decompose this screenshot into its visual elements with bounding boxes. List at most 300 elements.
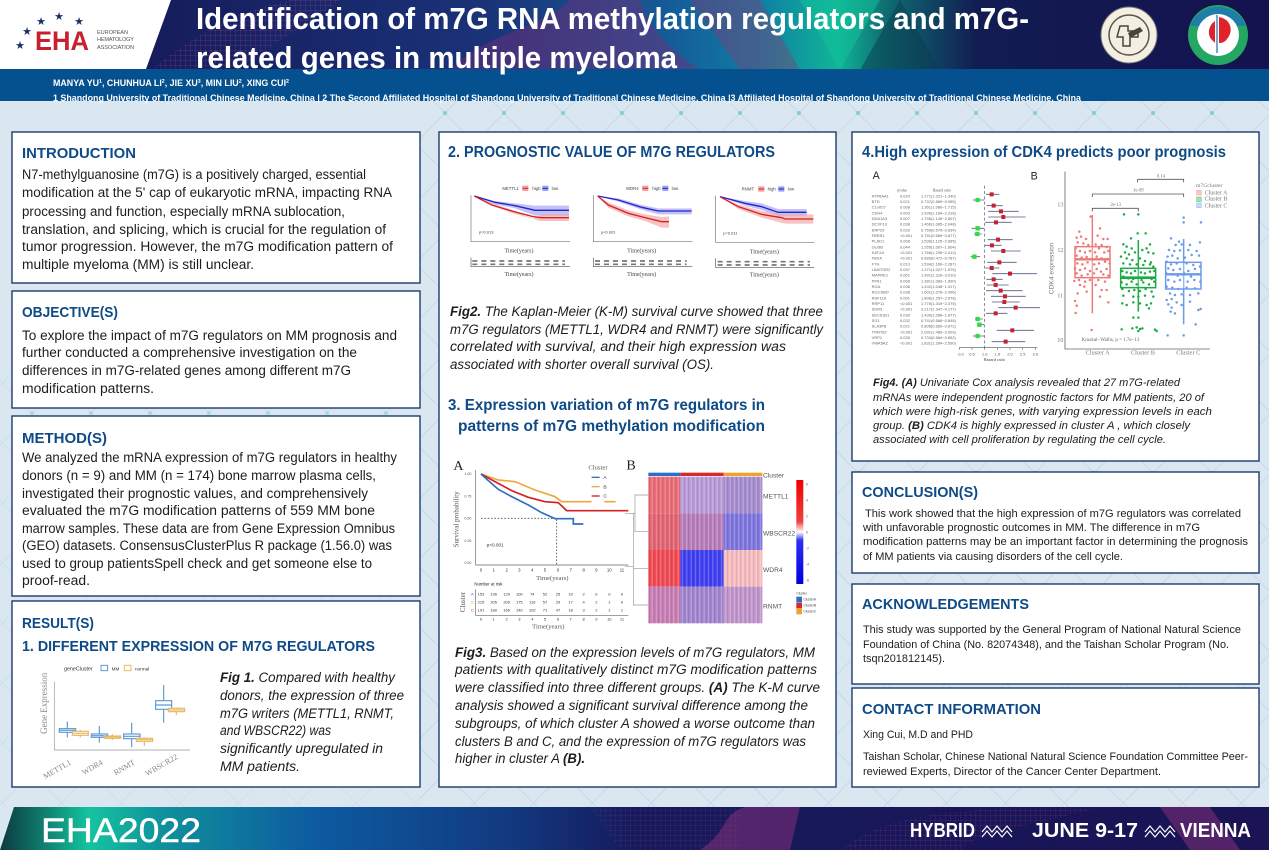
chart: heatmap B [625,458,817,623]
chart: forest plot A: <0.001 [900,256,913,261]
chart: heatmap B: METTL1 [763,494,789,501]
chart: forest plot A: 1.768(1.295−2.412) [921,250,957,255]
chart: forest plot A: 0.008 [900,278,911,283]
chart: CDK4 expression box plot B: Cluster A [1205,190,1228,196]
KM plot: METTL1: low [552,186,559,191]
chart: cluster survival curve A: Survival probability [452,491,460,547]
chart: cluster survival curve A: B [471,599,474,604]
chart: gene expression box plot: RNMT [112,758,137,777]
chart: forest plot A: 0.003 [900,210,911,215]
chart: cluster survival curve A: 6 [557,617,560,622]
KM plot: WDR4: Time(years) [627,271,656,278]
panel: method: evaluated the m7G modification patterns of 559 MM bone [22,503,375,518]
chart: forest plot A: PLAD1 [872,239,885,244]
chart: forest plot A: RGCSBD [872,290,889,295]
fig 2 caption: Fig2. The Kaplan-Meier (K-M) survival curve showed that three [450,304,823,319]
chart: forest plot A: 1.271(1.027−1.575) [921,267,957,272]
chart: forest plot A: 0.5 [969,352,976,357]
panel: method: METHOD(S) [22,430,107,447]
chart: forest plot A: 1.171(1.021−1.340) [921,193,957,198]
chart: forest plot A: 0.008 [900,239,911,244]
panel: acknowledgements: tsqn201812145). [863,653,945,665]
panel: method: We analyzed the mRNA expression of m7G regulators in healthy [22,450,397,465]
chart: cluster survival curve A: 29 [556,599,561,604]
chart: cluster survival curve A: B [603,484,607,490]
panel: acknowledgements: ACKNOWLEDGEMENTS [862,596,1029,613]
chart: forest plot A: 1.991(1.316−3.010) [921,273,957,278]
chart: cluster survival curve A: p<0.001 [487,543,504,548]
chart: heatmap B: WDR4 [763,567,783,574]
chart: forest plot A: 0.038 [900,290,911,295]
chart: gene expression box plot: WDR4 [80,758,104,777]
panel: introduction: N7-methylguanosine (m7G) is a positively charged, essential [22,167,366,182]
chart: cluster survival curve A: Cluster [588,464,608,471]
EHA logo: ★ [22,26,32,38]
chart: cluster survival curve A: 1 [608,599,611,604]
panel: acknowledgements [852,584,1259,684]
KM plot: METTL1: Time(years) [504,248,534,255]
authors and affiliations: 1 Shandong University of Traditional Chinese Medicine, China | 2 The Second Affiliated Hospital of Shandong University of Traditional Chinese Medicine, China |3 Affiliated Hospital of Shandong University of Traditional Chinese Medicine, China [53,92,1082,103]
panel: contact information: Xing Cui, M.D and PHD [863,729,973,741]
footer: event details [910,820,1251,842]
chart: forest plot A: <0.001 [900,301,913,306]
chart: cluster survival curve A: 1 [621,607,624,612]
chart: forest plot A: RGA [872,284,881,289]
KM plot: METTL1: Time(years) [504,271,534,278]
chart: forest plot A: 0.734(0.584−0.852) [921,335,957,340]
fig 2 caption: m7G regulators (METTL1, WDR4 and RNMT) were significantly [450,322,824,337]
fig 4 caption [873,377,1212,446]
heading: expression variation: patterns of m7G methylation modification [458,418,765,435]
fig 3 caption: were classified into three different groups. (A) The K-M curve [455,680,820,695]
chart: forest plot A: 0.044 [900,244,911,249]
panel: conclusion: of MM patients via causing disorders of the cell cycle. [863,551,1123,563]
chart: cluster survival curve A: 9 [595,568,598,573]
chart: cluster survival curve A: A [453,459,463,474]
panel: method: used to group patientsSpell check and get someone else to [22,556,372,571]
chart: CDK4 expression box plot B: Cluster C [1176,349,1200,356]
chart: forest plot A: FTH [872,261,880,266]
EHA logo: ★ [54,11,64,23]
chart: cluster survival curve A: 100 [516,591,523,596]
chart: forest plot A: A [873,170,881,182]
chart: cluster survival curve A: A [603,475,607,481]
EHA logo: ★ [74,16,84,28]
chart: CDK4 expression box plot B: B [1031,170,1038,182]
panel: contact information: reviewed Experts, Director of the Cancer Center Department. [863,766,1161,778]
chart: cluster survival curve A: 200 [503,599,511,604]
KM plot: WDR4: p<0.001 [601,230,616,235]
panel: results: 1. DIFFERENT EXPRESSION OF M7G REGULATORS [22,638,375,655]
chart: cluster survival curve A: 1.00 [464,472,471,476]
chart: forest plot A: 0.001 [900,273,911,278]
chart: CDK4 expression box plot B: 10 [1057,338,1063,344]
chart: forest plot A: <0.001 [900,329,913,334]
chart: CDK4 expression box plot B [1031,170,1228,356]
panel: contact information [852,688,1259,787]
chart: cluster survival curve A: 0.50 [464,517,471,521]
panel: method [12,416,420,596]
fig 4 caption: mRNAs were independent prognostic factors for MM patients, 20 of [873,392,1206,404]
chart: forest plot A: 1.0 [982,352,988,357]
EHA logo: HEMATOLOGY [97,37,134,43]
panel: conclusion [852,472,1259,573]
panel: objective: further conducted a comprehensive investigation on the [22,345,357,360]
chart: forest plot A: pvalue [897,189,907,193]
chart: cluster survival curve A: 2 [505,568,508,573]
chart: forest plot A: SG1 [872,318,880,323]
chart: forest plot A: SEC61B1 [872,312,890,317]
chart: heatmap B: Cluster [763,472,785,479]
chart: cluster survival curve A: 0 [621,599,624,604]
chart: forest plot A: 1.939(1.184−2.318) [921,210,957,215]
panel: middle results [439,132,836,787]
fig 3 caption: analysis showed a significant survival difference among the [455,698,808,713]
chart: CDK4 expression box plot B: Kruskal−Wallis, p = 1.7e−13 [1082,338,1140,343]
chart: forest plot A: RRP11 [872,301,885,306]
chart: forest plot A: 1.806(1.257−2.578) [921,295,957,300]
chart: cluster survival curve A: 6 [557,568,560,573]
panel: objective: modification patterns. [22,381,154,396]
chart: cluster survival curve A: 10 [607,617,612,622]
chart: cluster survival curve A: Time(years) [536,575,568,582]
chart: forest plot A: FBRS1 [872,233,885,238]
chart: forest plot A: 0.008 [900,205,911,210]
chart: forest plot A: <0.001 [900,341,913,346]
KM plot: WDR4: Time(years) [627,248,656,255]
chart: forest plot A: 0.030 [900,335,911,340]
chart: gene expression box plot: normal [135,667,149,672]
chart: heatmap B: Cluster [796,591,808,595]
chart: cluster survival curve A: 25 [556,591,561,596]
KM plot: WDR4: low [672,186,679,191]
chart: heatmap B: RNMT [763,604,782,611]
chart: forest plot A: ATP6AA1 [872,193,890,198]
panel: contact information: CONTACT INFORMATION [862,701,1041,718]
chart: cluster survival curve A: 0 [480,568,483,573]
chart: cluster survival curve A: 0 [621,591,624,596]
chart: cluster survival curve A: 74 [530,591,535,596]
panel: introduction: INTRODUCTION [22,145,136,162]
chart: cluster survival curve A: 8 [583,617,586,622]
panel: contact information: Taishan Scholar, Chinese National Natural Science Foundation Committee Peer- [863,751,1248,763]
chart: forest plot A: MAPRE1 [872,273,889,278]
chart: forest plot A: 0.759(0.575−0.834) [921,227,957,232]
chart: forest plot A: 0.805(0.669−0.872) [921,324,957,329]
chart: cluster survival curve A: 0 [595,591,598,596]
chart: gene expression box plot: WBSCR22 [144,752,179,778]
chart: cluster survival curve A: 11 [620,617,625,622]
chart: gene expression box plot: MM [112,667,120,672]
panel: conclusion: This work showed that the high expression of m7G regulators was correlated [865,508,1241,520]
chart: heatmap B: ClusterB [803,604,817,608]
panel: acknowledgements: Foundation of China (No. 82074348), and the Taishan Scholar Program (No. [863,639,1229,651]
KM plot: RNMT [716,186,814,279]
chart: cluster survival curve A: 52 [543,591,548,596]
footer: event details: VIENNA [1180,820,1251,842]
chart: forest plot A: VWA5AZ [872,341,888,346]
chart: forest plot A: 0.001 [900,295,911,300]
panel: introduction: translation, and splicing, which is crucial for the regulation of [22,222,386,237]
chart: forest plot A: 1.831(1.284−2.590) [921,341,957,346]
chart: cluster survival curve A: 7 [570,617,573,622]
chart: cluster survival curve A: 191 [478,607,485,612]
chart: heatmap B: ClusterA [803,598,817,602]
chart: forest plot A: Hazard ratio [933,189,951,193]
chart: heatmap B: WBSCR22 [763,530,795,537]
chart: cluster survival curve A: 140 [516,607,523,612]
chart: heatmap B: ClusterC [803,610,817,614]
chart: cluster survival curve A: 205 [490,599,498,604]
chart: cluster survival curve A: 0 [608,591,611,596]
panel: method: (GEO) datasets. ConsensusClusterPlus R package (1.56.0) was [22,538,392,553]
chart: forest plot A: 1.534(1.160−2.287) [921,261,957,266]
fig 1 caption: significantly upregulated in [220,741,383,756]
chart: forest plot A: 1.439(1.068−1.877) [921,312,957,317]
chart: forest plot A: 1.601(1.076−2.496) [921,290,957,295]
chart: forest plot A: <0.001 [900,307,913,312]
chart: heatmap B: -6 [806,578,809,582]
chart: cluster survival curve A: 129 [503,591,511,596]
panel: objective: differences in m7G-related genes among different m7G [22,363,351,378]
chart: cluster survival curve A: 10 [568,591,574,596]
fig 1 caption: and WBSCR22) was [220,723,331,738]
chart: forest plot A: 0.020 [900,227,911,232]
chart: heatmap B: B [626,458,636,473]
panel: objective [12,291,420,408]
title: Identification of m7G RNA methylation regulators and m7G- [196,1,1029,36]
fig 4 caption: Fig4. (A) Univariate Cox analysis revealed that 27 m7G-related [873,377,1181,389]
chart: cluster survival curve A: 4 [531,568,534,573]
chart: CDK4 expression box plot B: Cluster C [1205,203,1227,209]
chart: forest plot A: LAMTOR2 [872,267,891,272]
panel: introduction: processing and function, especially mRNA sublocation, [22,204,345,219]
chart: forest plot A: DDA1A3 [872,216,888,221]
panel: objective: To explore the impact of m7G regulators on MM prognosis and [22,328,397,343]
fig 1 caption: donors, the expression of three [220,688,404,703]
KM plot: METTL1: METTL1 [502,186,520,191]
chart: forest plot A: C1orf27 [872,205,887,210]
KM plot: WDR4 [593,186,692,278]
chart: cluster survival curve A: 8 [582,568,585,573]
chart: cluster survival curve A: 71 [543,607,548,612]
fig 1 caption [220,670,404,774]
chart: forest plot A: RSF118 [872,295,887,300]
chart: heatmap B: 6 [806,482,808,486]
chart: cluster survival curve A: 17 [568,599,574,604]
chart: forest plot A: 0.032 [900,318,911,323]
title: related genes in multiple myeloma [196,40,678,75]
fig 1 caption: m7G writers (METTL1, RNMT, [220,706,394,721]
KM plot: METTL1 [471,186,570,278]
chart: cluster survival curve A: 4 [531,617,534,622]
university emblem [1101,7,1157,63]
chart: forest plot A: 0.030 [900,312,911,317]
fig 2 caption: associated with shorter overall survival (OS). [450,357,714,372]
footer: event details: HYBRID [910,820,975,842]
chart: cluster survival curve A: 180 [490,607,498,612]
chart: CDK4 expression box plot B: 0.14 [1157,174,1166,179]
chart: forest plot A: 0.024 [900,193,911,198]
fig 4 caption: which were high-risk genes, with varying expression levels in each [873,406,1212,418]
chart: cluster survival curve A: 10 [607,568,612,573]
chart: cluster survival curve A: 4 [583,599,586,604]
chart: cluster survival curve A: C [603,494,607,500]
EHA logo: EHA [35,26,89,56]
chart: cluster survival curve A: 1 [608,607,611,612]
chart: forest plot A: 0.037 [900,267,911,272]
chart: gene expression box plot: geneCluster [64,667,93,673]
chart: forest plot A: 1.361(1.080−1.715) [921,205,957,210]
panel: results [12,601,420,787]
chart: cluster survival curve A: 5 [544,568,547,573]
chart: cluster survival curve A: 47 [556,607,561,612]
fig 3 caption [454,645,820,766]
chart: forest plot A: ERP29 [872,227,885,232]
chart: CDK4 expression box plot B: Cluster B [1131,349,1155,356]
panel: method: proof-read. [22,573,90,588]
chart: CDK4 expression box plot B: 11 [1057,294,1063,300]
chart: forest plot A: 0.021 [900,199,911,204]
chart: cluster survival curve A: 0.25 [464,539,471,543]
chart: gene expression box plot: Gene Expression [39,672,49,734]
chart: forest plot A: DCXF13 [872,222,888,227]
panel: conclusion: with unfavorable prognostic outcomes in MM. The difference in m7G [862,522,1200,534]
panel: method: marrow samples. These data are from Gene Expression Omnibus [22,521,395,536]
authors and affiliations: MANYA YU¹, CHUNHUA LI², JIE XU³, MIN LIU², XING CUI² [53,77,289,88]
chart: forest plot A: 0.741(0.568−0.848) [921,318,957,323]
hospital emblem [1188,5,1248,65]
chart: cluster survival curve A: 0 [480,617,483,622]
heading: CDK4: 4.High expression of CDK4 predicts poor prognosis [862,144,1226,161]
chart: forest plot A: 0.038 [900,222,911,227]
chart: cluster survival curve A: 116 [529,599,536,604]
panel: acknowledgements: This study was supported by the General Program of National Natural Science [863,624,1241,636]
chart: forest plot A: SDM1 [872,307,884,312]
chart: forest plot A: CDH4 [872,210,883,215]
fig 3 caption: clusters B and C, and the expression of m7G regulators was [455,734,806,749]
chart: forest plot A: 0.689(0.472−0.787) [921,256,957,261]
KM plot: RNMT: RNMT [742,187,754,192]
chart: forest plot A: 2.217(1.347−4.177) [921,307,957,312]
chart: heatmap B: -2 [806,546,809,550]
chart: cluster survival curve A: 0.75 [464,494,471,498]
chart: cluster survival curve A [452,459,628,631]
fig 2 caption [450,304,824,372]
chart: cluster survival curve A: 0.00 [464,561,471,565]
chart: forest plot A: 0.737(0.569−0.955) [921,199,957,204]
chart: Kaplan-Meier curves for METTL1, WDR4, RNMT [471,186,814,279]
chart: cluster survival curve A: 57 [543,599,548,604]
heading: expression variation [448,397,765,435]
chart: forest plot A: BTD [872,199,880,204]
panel: introduction: modification at the 5' cap of eukaryotic mRNA, impacting RNA [22,185,392,200]
chart: cluster survival curve A: 3 [583,607,586,612]
heading: expression variation: 3. Expression variation of m7G regulators in [448,397,765,414]
KM plot: WDR4: high [652,186,661,191]
chart: cluster survival curve A: 3 [518,617,521,622]
chart: cluster survival curve A: 5 [544,617,547,622]
chart: CDK4 expression box plot B: Cluster B [1205,197,1227,203]
fig 4 caption: group. (B) CDK4 is highly expressed in cluster A , which closely [873,420,1191,432]
chart: forest plot A: 0.0 [958,352,965,357]
heading: prognostic value: 2. PROGNOSTIC VALUE OF M7G REGULATORS [448,144,775,161]
chart: forest plot A: KAT2A [872,250,884,255]
chart: forest plot A: <0.001 [900,233,913,238]
fig 1 caption: MM patients. [220,759,300,774]
chart: forest plot A: Hazard ratio [984,357,1005,362]
fig 2 caption: correlated with survival, and their high expression was [450,339,786,354]
fig 3 caption: patients with qualitatively distinct m7G modification patterns [454,662,817,677]
chart: cluster survival curve A: 102 [529,607,536,612]
chart: cluster survival curve A: 175 [516,599,523,604]
panel: introduction [12,132,420,283]
chart: cluster survival curve A: 9 [595,617,598,622]
chart: forest plot A: 1.432(1.048−1.917) [921,284,957,289]
chart: CDK4 expression box plot B: 1e-09 [1133,189,1144,194]
chart: forest plot A: FBXA [872,256,882,261]
panel: method: investigated their prognostic values, and comprehensively [22,486,368,501]
chart: forest plot A: 1.536(1.125−2.085) [921,239,957,244]
fig 4 caption: associated with cell proliferation by regulating the cell cycle. [873,434,1166,446]
chart: cluster survival curve A: Time(years) [532,624,564,631]
title [196,1,1029,75]
chart: CDK4 expression box plot B: Cluster A [1086,349,1110,356]
panel: CDK4 prognosis [852,132,1259,461]
chart: forest plot A: TRNT82 [872,329,888,334]
panel: introduction: tumor progression. However, the m7G modification pattern of [22,239,393,254]
chart: cluster survival curve A: 136 [490,591,498,596]
footer: EHA2022: EHA2022 [41,812,201,850]
chart: forest plot A: 2.5 [1020,352,1026,357]
chart: forest plot A: GUSB [872,244,883,249]
chart: forest plot A: 1.5 [995,352,1001,357]
EHA logo [0,0,171,69]
chart: CDK4 expression box plot B: 2e-13 [1110,203,1122,208]
chart: cluster survival curve A: C [471,607,474,612]
chart: CDK4 expression box plot B: CDK4 expression [1048,242,1055,294]
chart: cluster survival curve A: Cluster [459,591,467,612]
footer banner [0,807,1269,850]
chart: heatmap B: 4 [806,498,808,502]
fig 3 caption: higher in cluster A (B). [455,751,585,766]
chart: CDK4 expression box plot B: 13 [1057,202,1063,208]
chart: heatmap B: 0 [806,530,808,534]
panel: method: donors (n = 9) and MM (n = 174) bone marrow plasma cells, [22,468,376,483]
chart: forest plot A: 0.751(0.589−0.877) [921,233,957,238]
chart: cluster survival curve A: 2 [595,599,598,604]
chart: forest plot A: <0.001 [900,250,913,255]
KM plot: RNMT: Time(years) [750,272,779,279]
chart: forest plot A: VRP1 [872,335,883,340]
EHA logo: ★ [15,40,25,52]
chart: forest plot A: PPA1 [872,278,882,283]
chart: gene expression box plot: METTL1 [42,758,73,781]
chart: gene expression box plot [39,665,190,781]
chart: forest plot A: 1.796(1.145−2.607) [921,216,957,221]
chart: CDK4 expression box plot B: 12 [1057,248,1063,254]
panel: conclusion: modification patterns may be an important factor in determining the prognosis [863,536,1248,548]
chart: cluster survival curve A: 18 [568,607,574,612]
chart: cluster survival curve A: 2 [583,591,586,596]
KM plot: METTL1: p=0.013 [479,230,494,235]
chart: forest plot A: 2.091(1.489−3.003) [921,329,957,334]
panel: objective: OBJECTIVE(S) [22,304,118,321]
chart: cluster survival curve A: 153 [478,591,485,596]
KM plot: RNMT: low [788,187,795,192]
chart: forest plot A: 1.466(1.065−2.048) [921,222,957,227]
KM plot: RNMT: p=0.011 [723,230,738,235]
